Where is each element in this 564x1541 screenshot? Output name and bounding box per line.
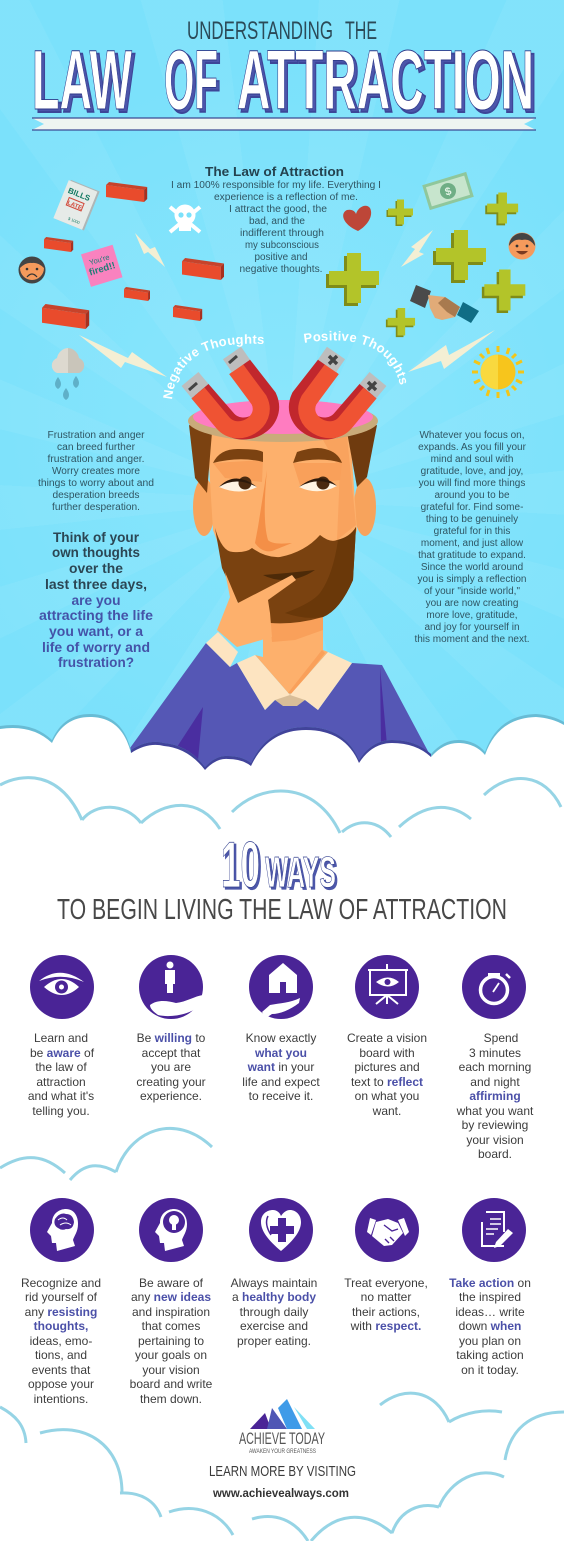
hand — [217, 572, 296, 647]
step 3: what you want: to receive it. — [249, 1089, 313, 1103]
mouth — [263, 570, 315, 580]
hair sides — [189, 425, 377, 493]
step 1: eye: the law of — [35, 1060, 87, 1074]
icon: minus bars — [42, 182, 224, 329]
step 1: eye: Learn and — [34, 1031, 88, 1045]
step 6: resisting thoughts: Recognize and — [21, 1276, 101, 1290]
step 6: resisting thoughts: tions, and — [35, 1348, 87, 1362]
icon: document and pencil — [482, 1212, 513, 1248]
icon: house on hand — [262, 963, 300, 1018]
icon: lightning bolts — [79, 233, 167, 377]
text block: frustration: can breed further — [57, 442, 136, 453]
step 5: stopwatch: by reviewing — [462, 1118, 528, 1132]
step 4: vision board: board with — [359, 1046, 415, 1060]
text block: whatever you focus on: thing to be genuinely — [426, 514, 518, 525]
heading: law of attraction: LAW — [32, 33, 132, 127]
icon: vision board — [368, 964, 408, 1004]
step 7: new ideas: any new ideas — [131, 1290, 211, 1304]
text block: whatever you focus on: Whatever you focus on, — [419, 430, 525, 441]
step 4: vision board: pictures and — [354, 1060, 420, 1074]
heading: law of attraction: OF — [164, 33, 218, 127]
text block: frustration: things to worry about and — [38, 478, 154, 489]
curved label: positive thoughts: Positive Thoughts — [304, 330, 406, 384]
face — [207, 432, 357, 570]
step 6: resisting thoughts — [21, 1198, 101, 1406]
step 6: resisting thoughts: ideas, emo- — [30, 1334, 92, 1348]
icon: heart — [343, 206, 371, 231]
eyebrows — [213, 448, 342, 463]
step 6: resisting thoughts: rid yourself of — [25, 1290, 98, 1304]
icon: bulb head — [155, 1209, 187, 1251]
step 5: stopwatch: board. — [478, 1147, 512, 1161]
step 4: vision board — [347, 955, 427, 1118]
step 1: eye: telling you. — [32, 1104, 90, 1118]
step 2: willing: you are — [151, 1060, 191, 1074]
icon: bills — [53, 179, 100, 230]
icon: heart with cross — [261, 1210, 301, 1251]
heading: law of attraction: LAW — [35, 36, 135, 130]
ears — [193, 478, 376, 536]
callout: think of your own thoughts: Think of your — [53, 530, 140, 545]
eyes — [219, 476, 337, 492]
step 4: vision board: on what you — [355, 1089, 419, 1103]
illustration: man with open head — [125, 353, 435, 800]
step 5: stopwatch: Spend — [484, 1031, 518, 1045]
icon: bills: $ 1000 — [67, 216, 81, 225]
text block: whatever you focus on: expands. As you fill your — [418, 442, 527, 453]
step 10: take action: taking action — [456, 1348, 524, 1362]
icon: dollar bill: $ — [444, 185, 453, 199]
collar — [237, 652, 352, 710]
open skull rim and brain — [188, 400, 378, 442]
step 8: healthy body: through daily — [240, 1305, 308, 1319]
eye shadows — [213, 460, 342, 485]
icon: person on hand — [150, 962, 203, 1016]
step 10: take action: on it today. — [461, 1363, 519, 1377]
callout: think of your own thoughts: are you — [72, 593, 120, 608]
text block: frustration: Frustration and anger — [48, 430, 145, 441]
callout: think of your own thoughts: own thoughts — [52, 545, 140, 560]
cloud divider — [0, 714, 564, 800]
step 10: take action: the inspired — [459, 1290, 521, 1304]
step 1: eye: be aware of — [30, 1046, 95, 1060]
step 8: healthy body: exercise and — [240, 1319, 308, 1333]
negative icons group — [18, 179, 224, 400]
magnet: positive — [300, 353, 378, 430]
step 5: stopwatch: affirming — [469, 1089, 521, 1103]
icon: stopwatch — [480, 973, 510, 1004]
text block: law of attraction intro: I attract the good, the — [229, 204, 327, 215]
sweater — [125, 643, 435, 800]
icon: plus signs — [326, 192, 525, 337]
step 10: take action: Take action on — [449, 1276, 531, 1290]
step 7: new ideas: board and write — [130, 1377, 213, 1391]
step 8: healthy body — [231, 1198, 317, 1348]
icon: sad face — [18, 256, 46, 284]
step 3: what you want: want in your — [247, 1060, 314, 1074]
step 5: stopwatch: what you want — [456, 1104, 534, 1118]
step 10: take action — [449, 1198, 531, 1377]
callout: think of your own thoughts: last three days, — [45, 577, 147, 592]
step 2: willing: accept that — [142, 1046, 201, 1060]
step 4: vision board: text to reflect — [351, 1075, 423, 1089]
text block: whatever you focus on — [414, 430, 530, 645]
icon: eye — [39, 973, 84, 995]
step 3: what you want: what you — [254, 1046, 307, 1060]
website url: www.achievealways.com — [212, 1488, 349, 1500]
step 6: resisting thoughts: intentions. — [34, 1392, 88, 1406]
title — [32, 17, 537, 130]
heading: understanding the: UNDERSTANDING — [187, 17, 333, 45]
icon: you're fired note: You're — [88, 252, 111, 267]
logo: achieve today — [239, 1399, 325, 1455]
beard shade — [285, 527, 356, 618]
step 7: new ideas: pertaining to — [138, 1334, 204, 1348]
step 5: stopwatch: your vision — [466, 1133, 524, 1147]
step 7: new ideas: your goals on — [135, 1348, 207, 1362]
step 2: willing — [136, 955, 206, 1103]
icon: handshake — [410, 285, 479, 323]
call to action: LEARN MORE BY VISITING — [209, 1463, 356, 1480]
text block: law of attraction intro: experience is a reflection of me. — [214, 192, 358, 203]
step 6: resisting thoughts: events that — [32, 1363, 91, 1377]
icon: dollar bill — [422, 172, 474, 210]
step 10: take action: you plan on — [459, 1334, 521, 1348]
text block: whatever you focus on: that gratitude to expand. — [418, 550, 526, 561]
text block: whatever you focus on: around you to be — [434, 490, 510, 501]
icon: skull and crossbones — [170, 204, 200, 232]
step 1: eye — [28, 955, 95, 1118]
text block: law of attraction intro: I am 100% responsible for my life. Everything I — [171, 180, 381, 191]
logo mountains — [250, 1399, 315, 1429]
heading: understanding the: THE — [345, 17, 377, 45]
step 5: stopwatch: and night — [470, 1075, 520, 1089]
step 8: healthy body: Always maintain — [231, 1276, 317, 1290]
text block: whatever you focus on: grateful for. Find some- — [421, 502, 523, 513]
logo: achieve today: AWAKEN YOUR GREATNESS — [249, 1448, 316, 1455]
text block: frustration — [38, 430, 154, 513]
callout: think of your own thoughts: life of worry and — [42, 640, 150, 655]
step 9: respect: with respect. — [350, 1319, 421, 1333]
step 2: willing: experience. — [140, 1089, 202, 1103]
step 9: respect — [344, 1198, 428, 1333]
step 5: stopwatch — [456, 955, 534, 1161]
text block: whatever you focus on: grateful for in this — [434, 526, 510, 537]
text block: whatever you focus on: Since the world around — [421, 562, 523, 573]
step 2: willing: creating your — [136, 1075, 206, 1089]
positive icons group — [326, 172, 536, 398]
text block: law of attraction intro: indifferent through — [240, 228, 324, 239]
step 9: respect: their actions, — [352, 1305, 420, 1319]
step 9: respect: Treat everyone, — [344, 1276, 428, 1290]
step 7: new ideas: Be aware of — [139, 1276, 204, 1290]
step 7: new ideas: them down. — [140, 1392, 202, 1406]
step 8: healthy body: a healthy body — [232, 1290, 316, 1304]
step 6: resisting thoughts: any resisting — [25, 1305, 97, 1319]
text block: whatever you focus on: you will find more things — [419, 478, 525, 489]
text block: whatever you focus on: gratitude, love, and joy, — [421, 466, 523, 477]
heading: 10 ways: 10 — [223, 830, 262, 903]
curved label: negative thoughts: Negative Thoughts — [163, 334, 264, 399]
step 1: eye: and what it's — [28, 1089, 94, 1103]
callout: think of your own thoughts — [39, 530, 154, 670]
icon: brain head — [47, 1209, 78, 1251]
logo: achieve today: ACHIEVE TODAY — [239, 1429, 325, 1448]
heading: 10 ways — [221, 828, 338, 903]
icon: handshake — [367, 1218, 409, 1246]
face shade — [323, 436, 356, 540]
icon: you're fired note: fired!! — [88, 260, 117, 278]
step 3: what you want — [242, 955, 320, 1103]
cuff — [206, 632, 238, 667]
text block: frustration: frustration and anger. — [48, 454, 144, 465]
neck — [255, 610, 328, 695]
icon: sun — [472, 346, 524, 398]
step 8: healthy body: proper eating. — [237, 1334, 311, 1348]
heading: 10 ways: WAYS — [267, 850, 338, 899]
callout: think of your own thoughts: you want, or a — [49, 624, 144, 639]
icon: you're fired note — [81, 245, 123, 287]
text block: law of attraction intro: positive and — [254, 252, 308, 263]
step 10: take action: ideas… write — [455, 1305, 525, 1319]
text block: frustration: further desperation. — [52, 502, 140, 513]
text block: whatever you focus on: you are now creating — [426, 598, 518, 609]
text block: law of attraction intro: bad, and the — [249, 216, 305, 227]
icon: bills: LATE — [66, 200, 83, 212]
text block: whatever you focus on: of your "inside world," — [424, 586, 520, 597]
ribbon — [32, 118, 536, 130]
text block: whatever you focus on: mind and soul with — [431, 454, 513, 465]
step 3: what you want: Know exactly — [246, 1031, 316, 1045]
beard — [215, 527, 356, 623]
step 4: vision board: want. — [372, 1104, 401, 1118]
callout: think of your own thoughts: attracting the life — [39, 608, 154, 623]
text block: law of attraction intro: negative thoughts. — [240, 264, 322, 275]
icon: lightning bolts — [401, 230, 495, 372]
magnet: negative — [189, 353, 268, 430]
text block: whatever you focus on: this moment and the next. — [414, 634, 530, 645]
step 2: willing: Be willing to — [137, 1031, 206, 1045]
step 6: resisting thoughts: thoughts, — [34, 1319, 88, 1333]
step 7: new ideas: that comes — [142, 1319, 200, 1333]
text block: whatever you focus on: you is simply a reflection — [418, 574, 526, 585]
step 1: eye: attraction — [36, 1075, 86, 1089]
heading: law of attraction — [32, 33, 537, 130]
heading: 10 ways: 10 — [221, 828, 260, 901]
icon: bills: BILLS — [67, 186, 92, 203]
step 10: take action: down when — [459, 1319, 521, 1333]
text block: whatever you focus on: more love, gratitude, — [426, 610, 518, 621]
text block: frustration: Worry creates more — [52, 466, 140, 477]
step 6: resisting thoughts: oppose your — [28, 1377, 94, 1391]
step 3: what you want: life and expect — [242, 1075, 320, 1089]
text block: whatever you focus on: moment, and just allow — [421, 538, 524, 549]
text block: law of attraction intro — [171, 164, 381, 275]
text block: frustration: desperation breeds — [52, 490, 140, 501]
callout: think of your own thoughts: frustration? — [58, 655, 134, 670]
nose — [255, 470, 292, 551]
text block: whatever you focus on: and joy for yourself in — [424, 622, 520, 633]
icon: rain cloud — [52, 348, 84, 400]
heading: law of attraction: OF — [167, 36, 221, 130]
icon: happy face — [508, 232, 536, 260]
step 7: new ideas: your vision — [142, 1363, 200, 1377]
callout: think of your own thoughts: over the — [69, 561, 123, 576]
step 7: new ideas — [130, 1198, 213, 1406]
step 7: new ideas: and inspiration — [132, 1305, 210, 1319]
heading: 10 ways: WAYS — [265, 848, 336, 897]
text block: law of attraction intro: The Law of Attraction — [205, 164, 344, 179]
step 5: stopwatch: 3 minutes — [469, 1046, 521, 1060]
step 9: respect: no matter — [361, 1290, 411, 1304]
step 5: stopwatch: each morning — [459, 1060, 531, 1074]
text block: law of attraction intro: my subconscious — [245, 240, 319, 251]
step 4: vision board: Create a vision — [347, 1031, 427, 1045]
